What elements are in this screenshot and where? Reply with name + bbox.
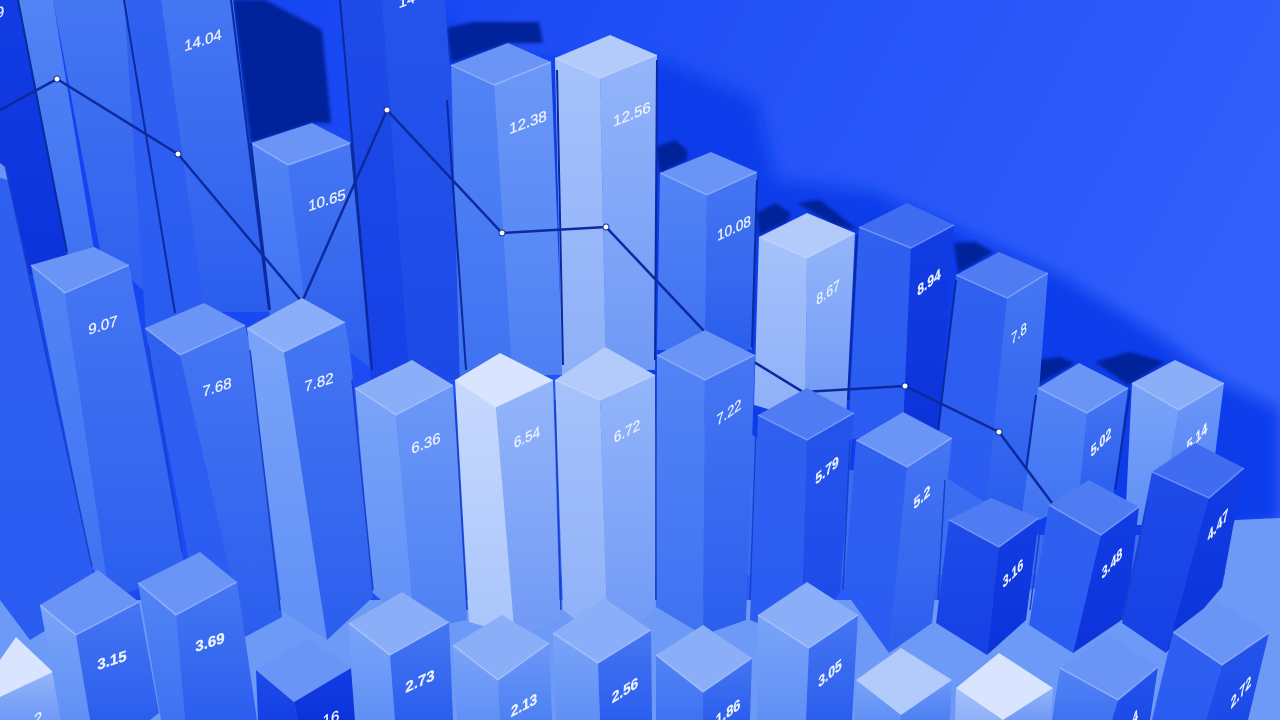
bar: 3.15: 3.15	[97, 648, 127, 674]
bar: front white at far left	[0, 637, 60, 720]
bar: 3.16: 3.16	[1003, 555, 1023, 592]
bar: 7.82	[247, 298, 373, 640]
bar: 14 partly cut off at the top	[340, 0, 470, 395]
bar: short front	[855, 648, 952, 720]
bar: 8.67: 8.67	[816, 277, 840, 309]
bar: 3.15	[40, 570, 159, 720]
bar: 2.72: 2.72	[1231, 672, 1251, 713]
bar: 2.56	[553, 598, 652, 720]
bar: 4.47	[1122, 443, 1244, 653]
bar: short white front	[955, 653, 1053, 720]
bar: 7.82: 7.82	[304, 370, 334, 396]
bar: 6.36	[355, 360, 467, 630]
bar: 16 dark	[256, 638, 355, 720]
bar: 5.14	[1125, 360, 1224, 525]
bar: far left middle	[0, 163, 95, 640]
bar: 7.8: 7.8	[1011, 320, 1027, 349]
bar: 5.02	[1020, 363, 1128, 530]
bar: 6.36: 6.36	[411, 430, 441, 458]
bar: 8.94	[848, 203, 954, 440]
bar: 6.54	[455, 353, 560, 640]
back row of bars	[0, 0, 1224, 530]
bar: 12.56: 12.56	[613, 99, 651, 131]
bar: 5.02: 5.02	[1091, 424, 1111, 461]
bar: far left back	[0, 0, 67, 275]
bar: 9.07	[31, 247, 185, 600]
bar: 4.47: 4.47	[1208, 505, 1228, 546]
bar: partly hidden front	[1052, 635, 1158, 720]
bar: 5.2: 5.2	[914, 482, 931, 514]
bar: 3.69	[138, 552, 257, 720]
dark contact shadows on the wall	[233, 0, 1165, 385]
bar: 10.08	[657, 152, 757, 350]
bar: 12.38	[451, 43, 563, 385]
floor	[0, 518, 1280, 720]
bar: 9.07: 9.07	[88, 313, 118, 339]
bar: 7.68: 7.68	[202, 375, 232, 401]
wall shadow cast by bars	[445, 0, 1280, 560]
bar: 2.73	[349, 592, 453, 720]
bar: 2.73: 2.73	[405, 667, 435, 697]
bar: 8.67	[754, 213, 855, 420]
bar: 10.65: 10.65	[308, 186, 346, 215]
bar: 1.86	[656, 625, 752, 720]
bar: 3.16	[936, 498, 1039, 655]
bar: 5.79	[750, 388, 854, 640]
middle row of bars	[0, 163, 1244, 655]
bar: 10.08: 10.08	[717, 212, 751, 245]
bar: 7.8	[930, 252, 1048, 520]
bar: 12.56	[555, 35, 657, 375]
bar: 3.05: 3.05	[818, 655, 842, 692]
bar: 2.56: 2.56	[612, 674, 638, 707]
bar: back second	[18, 0, 175, 320]
bar: 14.04	[124, 0, 269, 332]
bar: 14.04: 14.04	[184, 26, 222, 55]
bar: 2.13	[453, 615, 552, 720]
bar: 5.79: 5.79	[815, 453, 839, 489]
bar: 5.14: 5.14	[1187, 418, 1208, 456]
bar: 12.38: 12.38	[509, 108, 547, 138]
bar: 5.2	[844, 412, 952, 653]
bar: 6.72	[555, 347, 655, 645]
front row of bars	[0, 552, 1269, 720]
bar: 7.22	[656, 330, 755, 635]
bar: 7.22: 7.22	[717, 396, 741, 430]
bar: 2.72	[1152, 600, 1269, 720]
bar: 7.68	[145, 303, 282, 637]
line chart overlay with nodes	[0, 76, 1052, 503]
bar: 3.05	[757, 582, 858, 720]
bar: 3.69: 3.69	[195, 630, 225, 656]
bar: 10.65	[251, 123, 373, 370]
bar: 3.48	[1029, 480, 1139, 653]
bar: 6.54: 6.54	[514, 423, 540, 452]
bar: 8.94: 8.94	[917, 265, 941, 300]
bar: 6.72: 6.72	[614, 416, 640, 447]
bar: 3.48: 3.48	[1102, 544, 1123, 583]
